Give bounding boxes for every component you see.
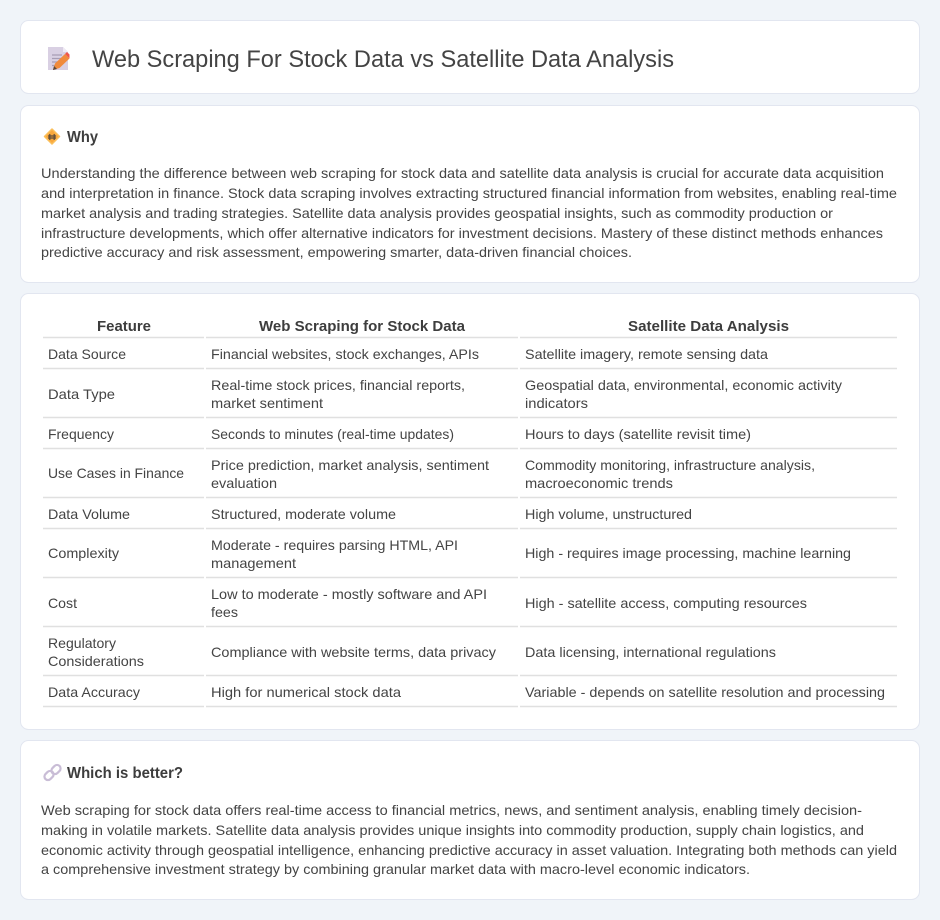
row: data type: Data Type xyxy=(48,386,115,402)
row: data accuracy: Variable - depends on satellite resolution and processing xyxy=(525,684,885,700)
row: data volume: Data Volume xyxy=(48,506,130,522)
table header row: Feature xyxy=(97,318,151,335)
row: use cases in finance: Commodity monitoring, infrastructure analysis, xyxy=(525,457,815,473)
table header row: Web Scraping for Stock Data xyxy=(259,318,466,335)
icon: orange diamond sign xyxy=(44,129,60,144)
row: data accuracy: Data Accuracy xyxy=(48,684,140,700)
row: regulatory considerations xyxy=(43,635,897,676)
text block: why paragraph: Understanding the difference between web scraping for stock data and satellite data analysis is crucial for accurate data acquisition xyxy=(41,165,884,181)
row: complexity xyxy=(43,537,897,578)
row: data type: Real-time stock prices, financial reports, xyxy=(211,377,465,393)
text block: which is better paragraph: economic activity through geospatial intelligence, enhancing predictive accuracy in asset valuation. Integrating both methods can yield xyxy=(41,842,897,858)
text block: why paragraph xyxy=(41,165,897,260)
row: data source: Satellite imagery, remote sensing data xyxy=(525,346,768,362)
table header row xyxy=(43,318,897,338)
text block: why paragraph: and interpretation in finance. Stock data scraping involves extracting structured financial information from websites, enabling real-time xyxy=(41,185,897,201)
heading: which is better: Which is better? xyxy=(67,765,183,782)
row: regulatory considerations: Considerations xyxy=(48,653,144,669)
panel: which is better xyxy=(20,740,920,900)
text block: which is better paragraph: making in volatile markets. Satellite data analysis provides unique insights into commodity production, supply chain logistics, and xyxy=(41,822,864,838)
text block: why paragraph: market analysis and trading strategies. Satellite data analysis provides geospatial insights, such as commodity production or xyxy=(41,205,833,221)
row: cost: Cost xyxy=(48,595,77,611)
row: data accuracy xyxy=(43,684,897,706)
row: complexity: High - requires image processing, machine learning xyxy=(525,545,851,561)
row: data type xyxy=(43,377,897,418)
row: data source xyxy=(43,346,897,368)
row: regulatory considerations: Compliance with website terms, data privacy xyxy=(211,644,496,660)
row: data volume: High volume, unstructured xyxy=(525,506,692,522)
panel: why xyxy=(20,106,920,282)
row: frequency xyxy=(43,426,897,448)
row: data volume xyxy=(43,506,897,528)
row: data accuracy: High for numerical stock data xyxy=(211,684,401,700)
row: use cases in finance: macroeconomic trends xyxy=(525,475,673,491)
row: data source: Financial websites, stock exchanges, APIs xyxy=(211,346,479,362)
text block: why paragraph: infrastructure developments, which offer alternative indicators for investment decisions. Mastery of these distinct methods enhances xyxy=(41,225,883,241)
row: use cases in finance: evaluation xyxy=(211,475,277,491)
row: data volume: Structured, moderate volume xyxy=(211,506,396,522)
row: cost xyxy=(43,586,897,626)
row: regulatory considerations: Regulatory xyxy=(48,635,116,651)
text block: which is better paragraph xyxy=(41,802,897,877)
row: cost: Low to moderate - mostly software and API xyxy=(211,586,487,602)
row: complexity: Moderate - requires parsing HTML, API xyxy=(211,537,458,553)
table header row: Satellite Data Analysis xyxy=(628,318,789,335)
panel: comparison table xyxy=(20,294,920,730)
title: Web Scraping For Stock Data vs Satellite Data Analysis xyxy=(92,46,674,73)
text block: why paragraph: predictive accuracy and risk assessment, empowering smarter, data-driven financial choices. xyxy=(41,244,632,260)
row: frequency: Frequency xyxy=(48,426,114,442)
row: data source: Data Source xyxy=(48,346,126,362)
row: complexity: Complexity xyxy=(48,545,119,561)
row: regulatory considerations: Data licensing, international regulations xyxy=(525,644,776,660)
row: data type: indicators xyxy=(525,395,588,411)
row: cost: fees xyxy=(211,604,238,620)
text block: which is better paragraph: Web scraping for stock data offers real-time access to financial metrics, news, and sentiment analysis, enabling timely decision- xyxy=(41,802,862,818)
row: use cases in finance xyxy=(43,457,897,498)
row: use cases in finance: Use Cases in Finance xyxy=(48,465,184,481)
icon: chain link xyxy=(43,763,62,782)
row: complexity: management xyxy=(211,555,296,571)
heading: why: Why xyxy=(67,129,98,146)
row: data type: Geospatial data, environmental, economic activity xyxy=(525,377,842,393)
row: frequency: Seconds to minutes (real-time updates) xyxy=(211,426,454,442)
text block: which is better paragraph: a comprehensive investment strategy by combining granular market data with macro-level economic indicators. xyxy=(41,861,750,877)
row: data type: market sentiment xyxy=(211,395,323,411)
row: cost: High - satellite access, computing resources xyxy=(525,595,807,611)
panel: title header xyxy=(20,20,920,94)
row: frequency: Hours to days (satellite revisit time) xyxy=(525,426,751,442)
icon: document with pencil xyxy=(48,47,70,70)
row: use cases in finance: Price prediction, market analysis, sentiment xyxy=(211,457,489,473)
